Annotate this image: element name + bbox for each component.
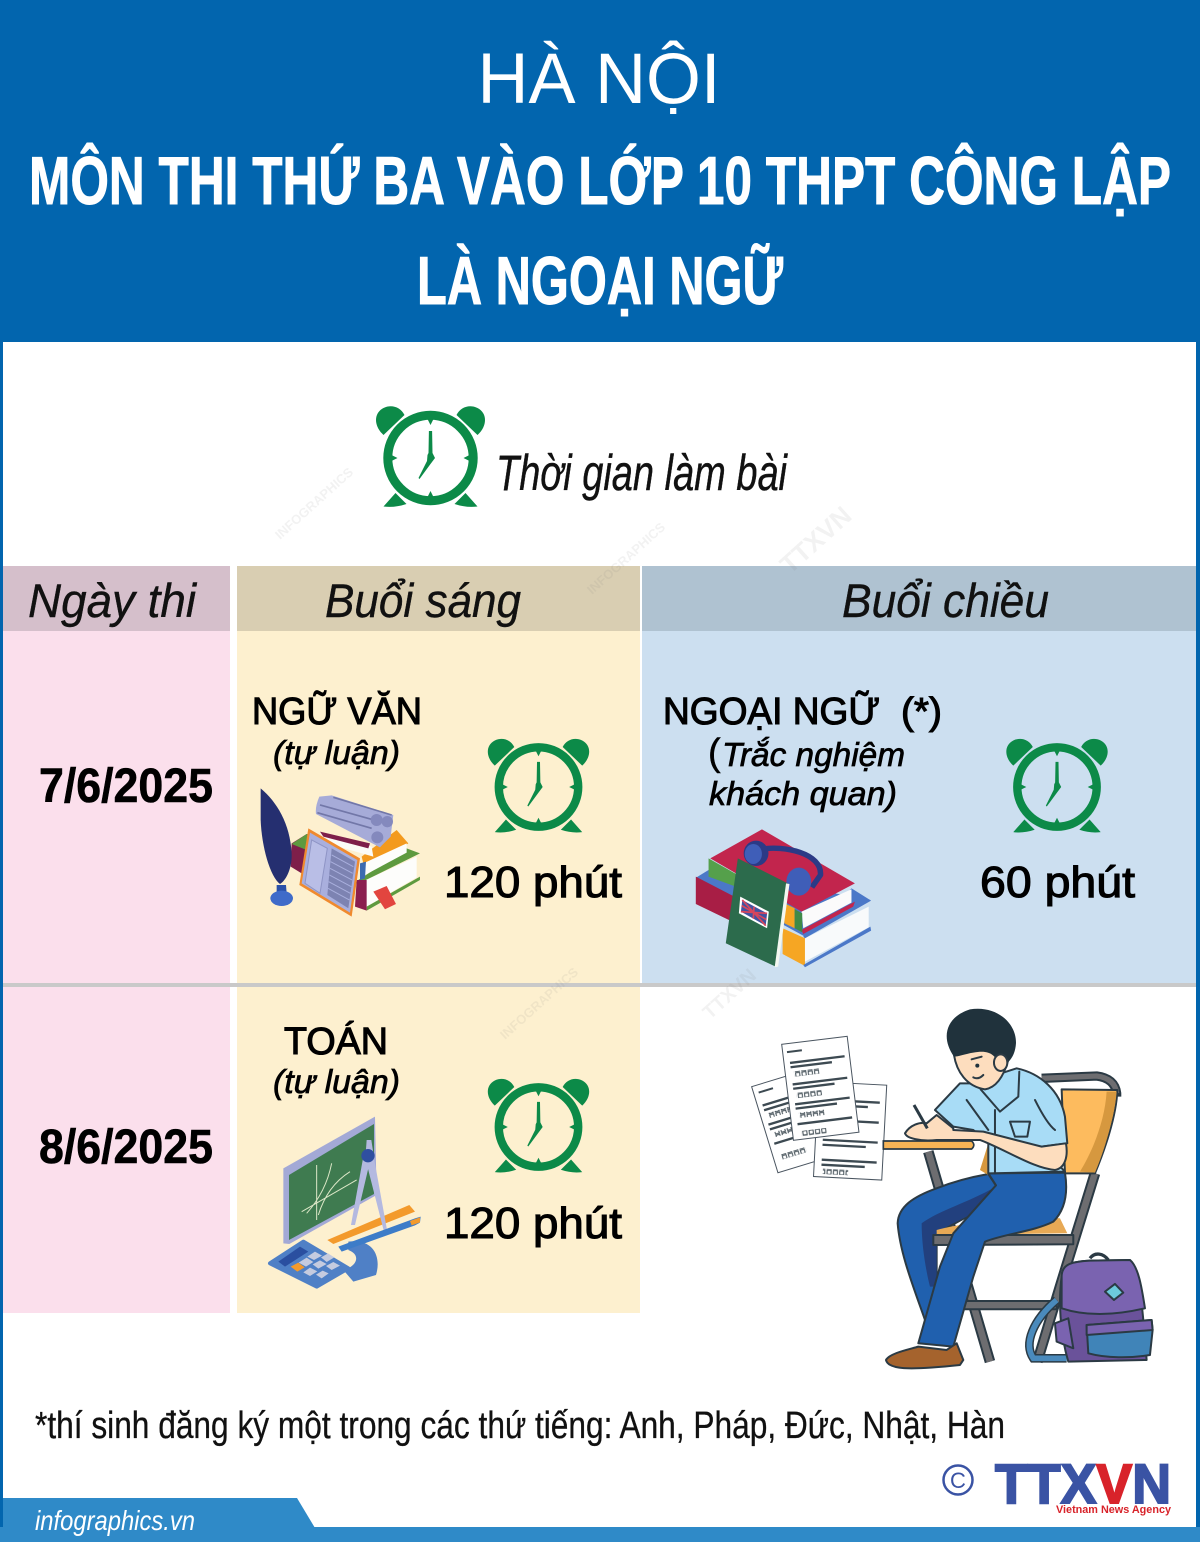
desk [883,1141,974,1149]
text: INFOGRAPHICS [272,464,356,542]
footnote: *thí sinh đăng ký một trong các thứ tiếng: Anh, Pháp, Đức, Nhật, Hàn [35,1405,1005,1447]
schedule table header [3,566,1196,631]
exam format: (tự luận) [273,734,400,771]
date cell: 8/6/2025 [39,1121,213,1174]
student [886,1009,1067,1368]
header cell: exam date [3,566,230,631]
panel: foreign language [642,631,1196,983]
exam format [708,732,905,812]
icon: alarm clock [488,739,589,832]
subject name: TOÁN [284,1020,388,1063]
icon: chalkboard, compass and calculator [270,1117,421,1287]
icon: alarm clock [376,406,485,507]
duration: 120 phút [444,858,622,907]
backpack [1029,1254,1153,1362]
chair seat [933,1218,1073,1309]
title [29,40,1171,319]
icon: alarm clock [1006,739,1108,832]
panel: literature [237,631,640,983]
illustration: student taking exam [752,1009,1153,1368]
exam format: ( [708,732,721,774]
header cell: morning: Buổi sáng [325,574,521,627]
date cell [3,987,230,1313]
text: TTXVN [699,965,761,1024]
exam format: khách quan) [709,775,897,812]
header cell: morning [237,566,640,631]
agency wordmark: TTXVN [995,1452,1171,1515]
title line: Hà Nội: HÀ NỘI [478,40,720,119]
title line: subject: LÀ NGOẠI NGỮ [417,242,783,319]
agency tagline: Vietnam News Agency [1056,1504,1172,1516]
chair [928,1076,1117,1362]
text: INFOGRAPHICS [497,964,581,1042]
duration: 120 phút [444,1199,622,1248]
row: 8/6/2025 [3,987,640,1313]
header cell: exam date: Ngày thi [28,574,198,627]
header cell: afternoon: Buổi chiều [842,574,1049,627]
row: 7/6/2025 [3,631,1196,983]
exam format: (tự luận) [273,1063,400,1100]
copyright mark: C [950,1468,966,1493]
header cell: afternoon [642,566,1196,631]
student far leg [898,1174,997,1320]
exam format: Trắc nghiệm [722,736,905,773]
text: TTXVN [774,500,857,579]
logo: TTXVN copyright [944,1452,1172,1516]
icon: alarm clock [488,1079,589,1172]
subject name: (*) [901,691,942,733]
panel: mathematics [237,987,640,1313]
subject name: NGOẠI NGỮ [663,689,880,733]
copyright mark [944,1466,972,1494]
heading text: Thời gian làm bài [496,445,788,501]
footer band [0,1498,1200,1542]
date cell [3,631,230,983]
exam papers [752,1036,887,1180]
duration: 60 phút [980,858,1135,907]
icon: books and feather quill [261,788,420,917]
icon: language books with headphones [696,829,871,967]
subject name: NGỮ VĂN [252,689,422,733]
date cell: 7/6/2025 [39,760,213,813]
text: INFOGRAPHICS [584,519,668,597]
exam duration heading [376,406,788,507]
website label: infographics.vn [35,1505,195,1536]
